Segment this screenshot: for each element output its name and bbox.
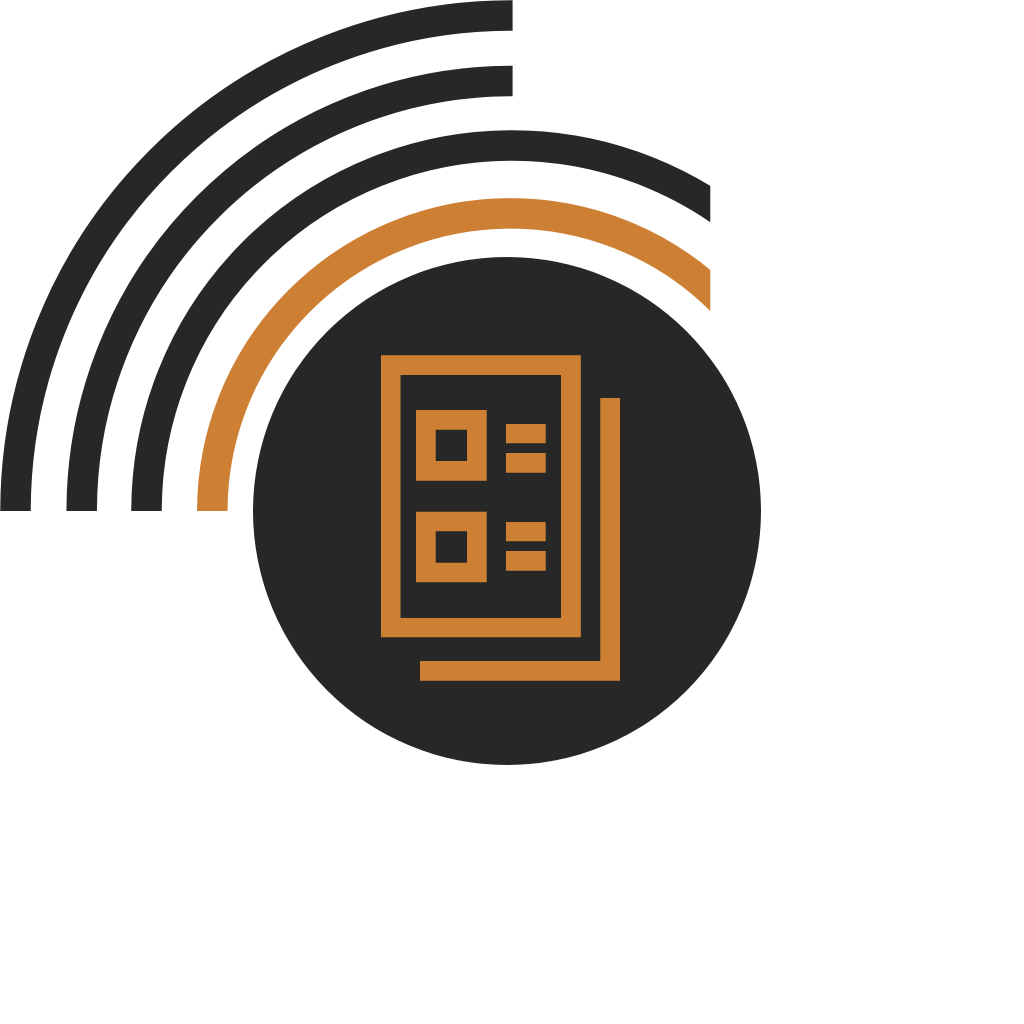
document front page bbox=[381, 355, 581, 637]
arc: second dark bbox=[66, 66, 513, 511]
document back page edge bbox=[420, 398, 620, 681]
arc: third dark bbox=[131, 130, 710, 511]
list item 2 lines bbox=[506, 522, 546, 571]
list item 2 checkbox bbox=[416, 512, 487, 582]
icon: document with list bbox=[381, 355, 620, 681]
dark circle bbox=[253, 257, 761, 765]
list item 1 lines bbox=[506, 424, 546, 473]
arc: orange bbox=[197, 198, 710, 511]
infographic: concentric arcs and document icon bbox=[0, 0, 761, 765]
arc: outer dark bbox=[0, 0, 513, 511]
list item 1 checkbox bbox=[416, 410, 487, 481]
